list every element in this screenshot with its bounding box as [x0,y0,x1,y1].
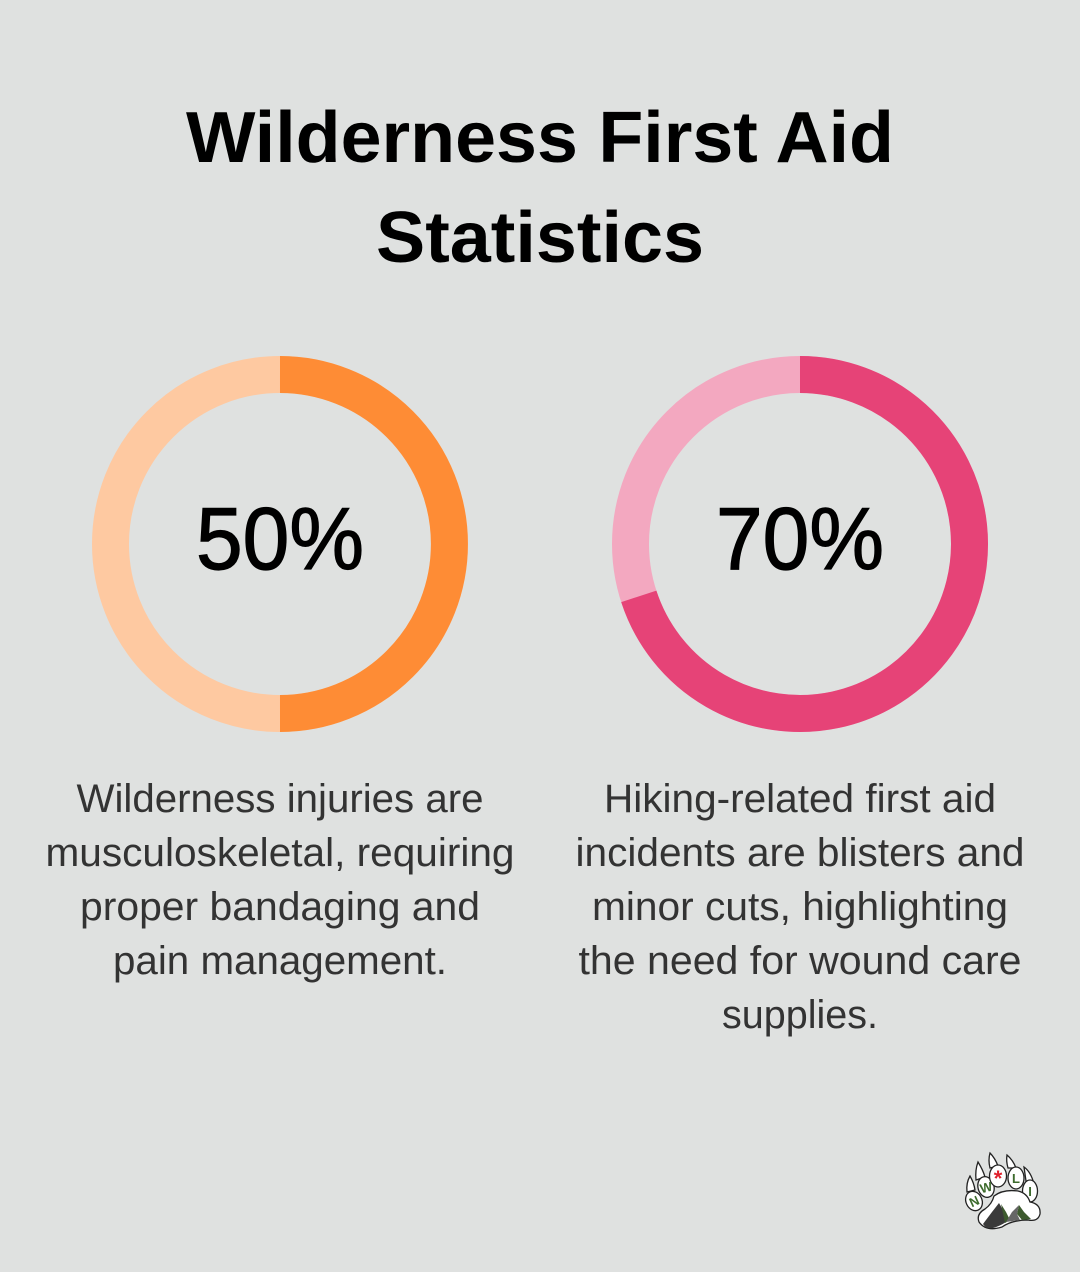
description: musculoskeletal injuries: Wilderness injuries are [76,777,484,821]
toes [963,1165,1038,1213]
donut chart: 50% [110,374,450,714]
paw letters: N [967,1193,982,1210]
value: 70%: 70% [716,489,884,588]
description: blisters and minor cuts: Hiking-related first aid [604,777,996,821]
icon: bear paw logo [963,1153,1040,1229]
paw letters: W [978,1178,995,1196]
paw letters: * [994,1166,1003,1191]
value: 50%: 50% [196,489,364,588]
description: blisters and minor cuts: minor cuts, highlighting [592,885,1008,929]
paw letters: I [1028,1184,1032,1199]
title: Statistics [376,198,704,278]
panel: 50% statistic [46,374,514,983]
description: blisters and minor cuts [576,777,1024,1037]
description: musculoskeletal injuries: proper bandaging and [80,885,480,929]
paw letters [967,1166,1032,1210]
donut chart: 70% [630,374,970,714]
panel: 70% statistic [576,374,1024,1037]
description: musculoskeletal injuries: pain management. [113,939,447,983]
description: musculoskeletal injuries [46,777,514,983]
claws [967,1153,1034,1192]
description: blisters and minor cuts: the need for wound care [578,939,1022,983]
description: blisters and minor cuts: supplies. [722,993,878,1037]
title [186,98,894,278]
description: musculoskeletal injuries: musculoskeletal, requiring [46,831,514,875]
paw pad with mountains [978,1191,1040,1229]
description: blisters and minor cuts: incidents are blisters and [576,831,1024,875]
paw letters: L [1012,1171,1020,1186]
title: Wilderness First Aid [186,98,894,178]
